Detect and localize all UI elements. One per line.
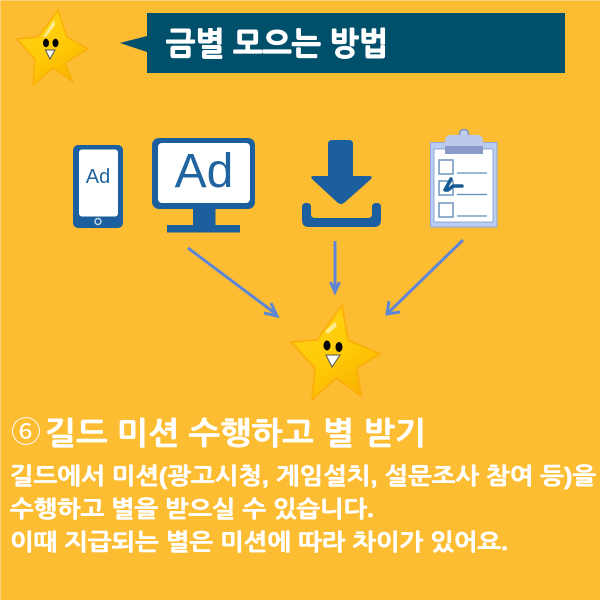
icon: large star mascot: [291, 305, 380, 400]
body text: 수행하고 별을 받으실 수 있습니다.: [10, 496, 374, 522]
arrow: left to star: [188, 248, 277, 316]
arrow: centre to star: [330, 241, 340, 292]
body text: 길드에서 미션(광고시청, 게임설치, 설문조사 참여 등)을: [10, 463, 596, 489]
heading: ⑥: [11, 409, 41, 451]
body text: [10, 463, 596, 555]
title: 금별 모으는 방법: [166, 26, 388, 62]
title banner: [120, 13, 565, 73]
phone ad label: Ad: [86, 166, 110, 188]
heading: 길드 미션 수행하고 별 받기: [45, 416, 426, 451]
icon: phone with ad: [73, 145, 123, 228]
arrow: right to star: [387, 240, 463, 314]
icon: download: [302, 140, 381, 227]
body text: 이때 지급되는 별은 미션에 따라 차이가 있어요.: [10, 529, 508, 555]
icon: clipboard checklist: [430, 130, 497, 227]
icon: monitor with ad: [152, 138, 255, 232]
monitor ad label: Ad: [175, 145, 233, 198]
icon: small star mascot: [17, 10, 88, 85]
